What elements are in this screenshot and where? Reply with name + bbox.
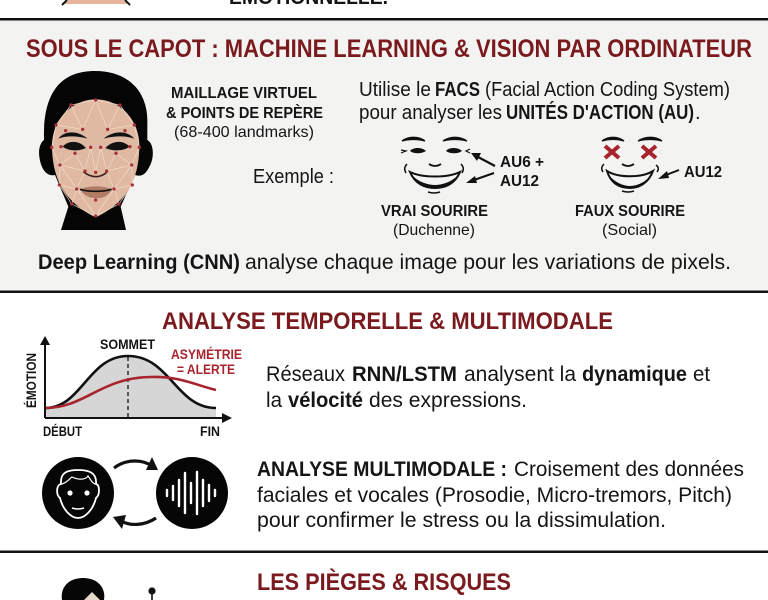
text: FACS description: Utilise le bbox=[359, 79, 431, 101]
previous section remnant bbox=[62, 0, 388, 9]
text: analyse multimodale: faciales et vocales (Prosodie, Micro-tremors, Pitch) bbox=[257, 484, 732, 507]
text: analyse multimodale bbox=[257, 458, 744, 532]
text: FACS description: UNITÉS D'ACTION (AU) bbox=[506, 101, 694, 124]
text: RNN LSTM: des expressions. bbox=[369, 389, 527, 412]
chart: emotion curve: ASYMÉTRIE bbox=[171, 346, 242, 362]
label: exemple: Exemple : bbox=[253, 166, 334, 188]
text: maillage virtuel: & POINTS DE REPÈRE bbox=[166, 103, 323, 122]
panel: analyse temporelle et multimodale bbox=[23, 308, 744, 532]
text: RNN LSTM: analysent la bbox=[464, 363, 576, 386]
icon: face mesh bbox=[39, 71, 153, 230]
text: FACS description: pour analyser les bbox=[359, 102, 502, 124]
text: RNN LSTM: Réseaux bbox=[266, 363, 345, 386]
text: RNN LSTM: RNN/LSTM bbox=[352, 363, 457, 386]
text: FACS description bbox=[359, 79, 730, 124]
text: analyse multimodale: ANALYSE MULTIMODALE : bbox=[257, 458, 507, 481]
label: faux sourire: (Social) bbox=[602, 222, 657, 239]
panel: pièges et risques bbox=[62, 568, 511, 600]
icon: vrai sourire face bbox=[401, 137, 470, 193]
icon: person head bbox=[62, 578, 104, 600]
text: RNN LSTM: vélocité bbox=[288, 389, 363, 412]
icon: antenna pin bbox=[148, 587, 156, 600]
text: RNN LSTM: et bbox=[693, 363, 710, 386]
text: analyse multimodale: Croisement des données bbox=[514, 458, 744, 481]
arrow: AU12 to faux sourire bbox=[658, 164, 722, 181]
heading: pièges et risques: LES PIÈGES & RISQUES bbox=[257, 568, 511, 596]
label: vrai sourire: VRAI SOURIRE bbox=[381, 203, 488, 220]
text: maillage virtuel: (68-400 landmarks) bbox=[174, 124, 314, 141]
label: vrai sourire: (Duchenne) bbox=[393, 222, 475, 239]
chart: emotion curve: = ALERTE bbox=[177, 361, 235, 377]
text: maillage virtuel: MAILLAGE VIRTUEL bbox=[171, 85, 317, 102]
arrows: AU6 and AU12 to vrai sourire: AU6 + bbox=[500, 154, 544, 171]
chart: emotion curve: DÉBUT bbox=[43, 423, 82, 439]
icon: face in circle bbox=[42, 457, 114, 529]
panel: sous le capot bbox=[0, 18, 768, 293]
text: FACS description: FACS bbox=[435, 79, 480, 101]
label: vrai sourire bbox=[381, 203, 488, 239]
text: analyse multimodale: pour confirmer le stress ou la dissimulation. bbox=[257, 509, 666, 532]
arrow: AU12 to faux sourire: AU12 bbox=[684, 164, 722, 181]
icon: sound wave in circle bbox=[156, 457, 228, 529]
icon: faux sourire face bbox=[602, 137, 662, 192]
text: FACS description: . bbox=[695, 102, 701, 124]
arrows: exchange between face and voice bbox=[113, 457, 158, 529]
chart: emotion curve: ÉMOTION bbox=[23, 353, 39, 408]
text: RNN LSTM: la bbox=[266, 389, 282, 412]
text: FACS description: (Facial Action Coding System) bbox=[485, 79, 730, 101]
text: RNN LSTM: dynamique bbox=[582, 363, 687, 386]
text: RNN LSTM bbox=[266, 363, 710, 412]
arrows: AU6 and AU12 to vrai sourire: AU12 bbox=[500, 173, 539, 190]
label: faux sourire bbox=[575, 203, 685, 239]
chart: emotion curve: SOMMET bbox=[100, 336, 155, 352]
heading: analyse temporelle: ANALYSE TEMPORELLE & MULTIMODALE bbox=[162, 308, 613, 335]
label: faux sourire: FAUX SOURIRE bbox=[575, 203, 685, 220]
text: deep learning: Deep Learning (CNN) bbox=[38, 251, 240, 274]
chart: emotion curve bbox=[23, 336, 242, 439]
chart: emotion curve: FIN bbox=[200, 423, 220, 439]
text: deep learning bbox=[38, 251, 731, 274]
text: deep learning: analyse chaque image pour les variations de pixels. bbox=[245, 251, 731, 274]
text: maillage virtuel bbox=[166, 85, 323, 141]
arrows: AU6 and AU12 to vrai sourire bbox=[466, 153, 544, 190]
